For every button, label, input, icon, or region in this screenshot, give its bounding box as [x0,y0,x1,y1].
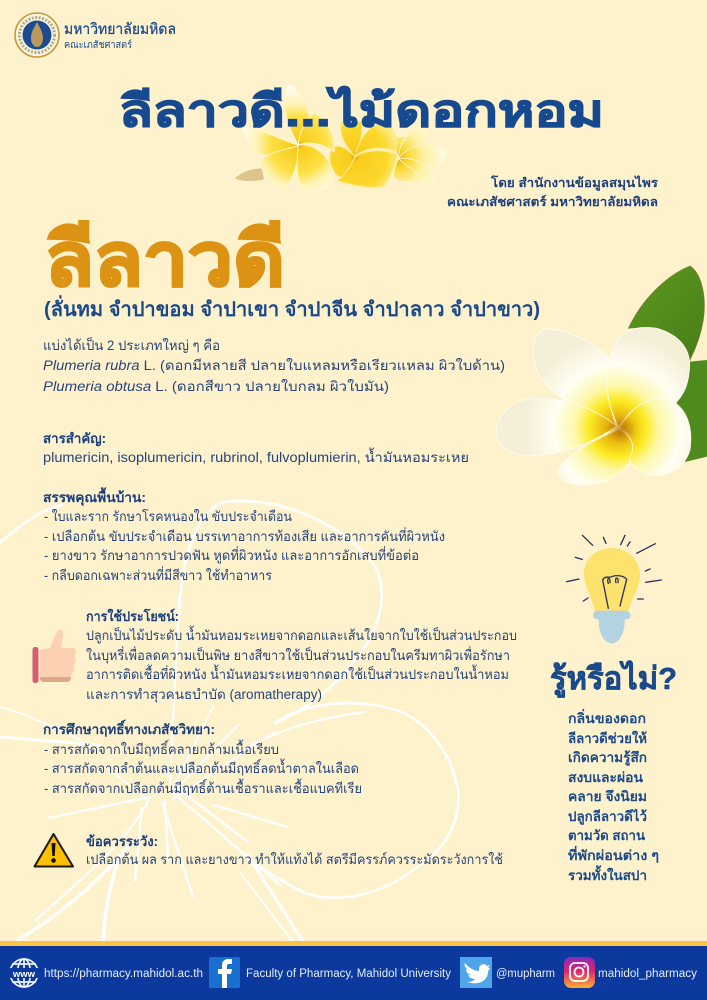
section: cautions [86,834,503,867]
text block: did you know: ปลูกลีลาวดีไว้ [568,808,647,825]
heading: plant name: ลีลาวดี [45,218,285,301]
section: traditional properties: - กลีบดอกเฉพาะส่วนที่มีสีขาว ใช้ทำอาหาร [44,566,272,583]
leaves [628,266,707,462]
flower middle [330,122,398,187]
section: traditional properties: - ใบและราก รักษาโรคหนองใน ขับประจำเดือน [44,508,292,524]
faculty name: คณะเภสัชศาสตร์ [64,39,133,51]
website: https://pharmacy.mahidol.ac.th [44,968,203,980]
decorative white flower line art [0,501,458,942]
subtitle: local names: (ลั่นทม จำปาขอม จำปาเขา จำปาจีน จำปาลาว จำปาขาว) [44,294,540,321]
footer bar [0,941,707,1000]
text block: species: Plumeria obtusa L. (ดอกสีขาว ปลายใบกลม ผิวใบมัน) [43,378,389,394]
text block: species: แบ่งได้เป็น 2 ประเภทใหญ่ ๆ คือ [43,336,220,353]
section: key compounds [43,431,469,465]
section: pharmacology [43,719,362,796]
flower left [242,83,334,193]
text block: species: Plumeria rubra L. (ดอกมีหลายสี ปลายใบแหลมหรือเรียวแหลม ผิวใบด้าน) [43,357,505,373]
section: traditional properties: สรรพคุณพื้นบ้าน: [43,487,146,506]
icon: facebook [209,957,240,988]
flowers: three yellow frangipani [235,83,447,193]
text block: did you know: กลิ่นของดอก [568,708,646,726]
section: pharmacology: - สารสกัดจากเปลือกต้นมีฤทธิ์ต้านเชื้อราและเชื้อแบคทีเรีย [44,778,362,796]
section: pharmacology: - สารสกัดจากใบมีฤทธิ์คลายกล้ามเนื้อเรียบ [44,739,279,757]
section: key compounds: plumericin, isoplumericin, rubrinol, fulvoplumierin, น้ำมันหอมระเหย [43,447,469,465]
title: ลีลาวดี...ไม้ดอกหอม [119,85,604,136]
text block: did you know: ลีลาวดีช่วยให้ [568,730,647,746]
section: traditional properties: - ยางขาว รักษาอาการปวดฟัน หูดที่ผิวหนัง และอาการอักเสบที่ข้อต่อ [44,546,419,564]
icon: twitter [460,957,492,988]
section: traditional properties [43,487,445,583]
section: uses: ปลูกเป็นไม้ประดับ น้ำมันหอมระเหยจากดอกและเส้นใยจากใบใช้เป็นส่วนประกอบ [86,625,517,644]
icon: light bulb [567,535,661,643]
section: uses: อาการติดเชื้อที่ผิวหนัง น้ำมันหอมระเหยจากดอกใช้เป็นส่วนประกอบในน้ำหอม [86,664,509,682]
text block: did you know [568,708,659,883]
section: cautions: เปลือกต้น ผล ราก และยางขาว ทำให้แท้งได้ สตรีมีครรภ์ควรระมัดระวังการใช้ [86,851,503,867]
section: cautions: ข้อควรระวัง: [86,834,158,849]
text block: did you know: สงบและผ่อน [568,770,644,785]
flower right [392,122,447,183]
icon: www globe [9,959,39,987]
section: uses: และการทำสุวคนธบำบัด (aromatherapy) [86,687,322,703]
icon: www globe: www [12,969,36,980]
bud [235,168,264,181]
section: key compounds: สารสำคัญ: [43,431,106,447]
twitter handle: @mupharm [496,968,555,980]
university name: มหาวิทยาลัยมหิดล [64,21,176,38]
section: uses: การใช้ประโยชน์: [86,607,179,624]
byline: โดย สำนักงานข้อมูลสมุนไพร [490,175,658,191]
section: pharmacology: การศึกษาฤทธิ์ทางเภสัชวิทยา: [43,719,215,737]
section: traditional properties: - เปลือกต้น ขับประจำเดือน บรรเทาอาการท้องเสีย และอาการคันที่ผิวหนัง [44,527,445,544]
text block: did you know: รวมทั้งในสปา [568,865,647,883]
text block: did you know: ตามวัด สถาน [568,828,646,843]
byline [447,175,658,209]
text block: did you know: เกิดความรู้สึก [568,750,647,766]
section: pharmacology: - สารสกัดจากลำต้นและเปลือกต้นมีฤทธิ์ลดน้ำตาลในเลือด [44,758,359,776]
text block: did you know: ที่พักผ่อนต่าง ๆ [568,845,659,863]
section: uses: ในบุหรี่เพื่อลดความเป็นพิษ ยางสีขาวใช้เป็นส่วนประกอบในครีมทาผิวเพื่อรักษา [86,646,510,664]
icon: thumbs up [32,630,76,683]
facebook name: Faculty of Pharmacy, Mahidol University [246,968,451,980]
text block: species [43,336,505,394]
petals [496,327,691,485]
heading: did you know: รู้หรือไม่? [550,660,677,698]
instagram handle: mahidol_pharmacy [598,968,697,980]
large flower and leaves [496,266,707,485]
logo seal [15,13,59,57]
logo: Mahidol University [15,13,176,57]
icon: warning triangle [34,834,73,866]
byline: คณะเภสัชศาสตร์ มหาวิทยาลัยมหิดล [447,194,658,209]
section: uses [86,607,517,703]
icon: instagram [564,957,595,988]
text block: did you know: คลาย จึงนิยม [568,789,647,804]
